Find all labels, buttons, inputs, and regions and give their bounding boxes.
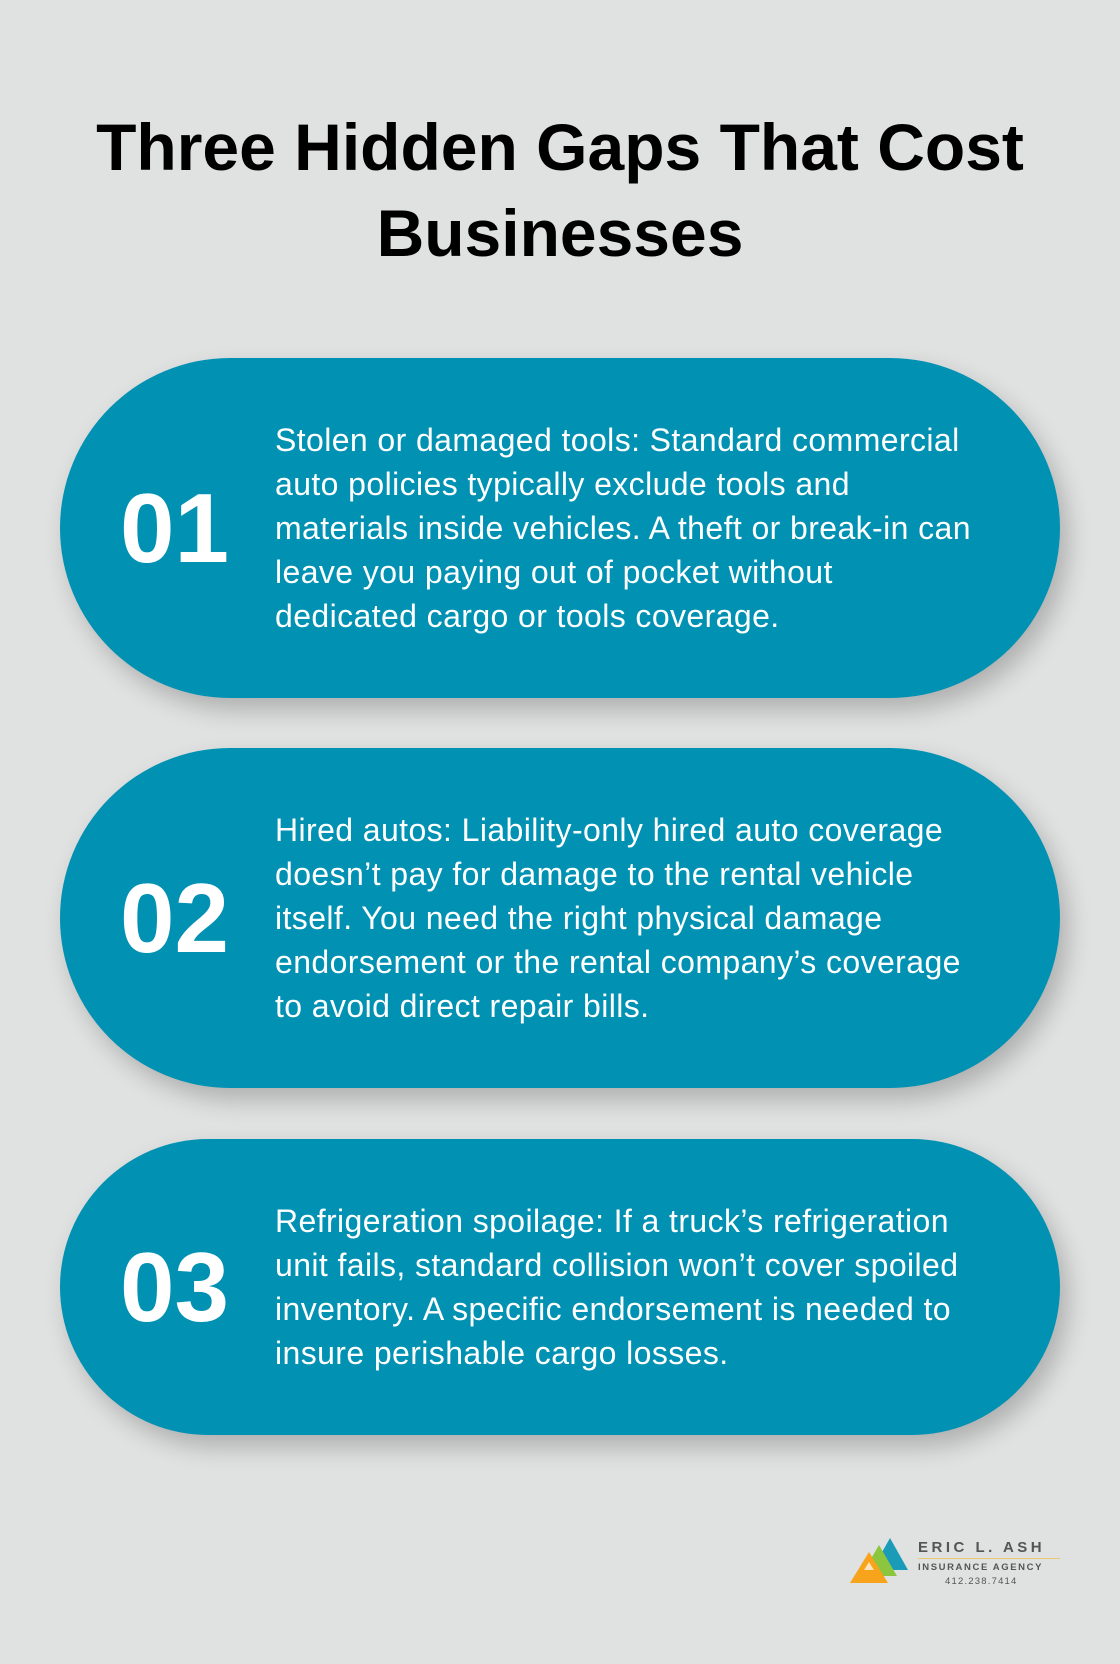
number 02: 02 (120, 863, 229, 973)
text: hired autos: endorsement or the rental company’s coverage (275, 944, 961, 980)
title: Businesses (377, 196, 743, 270)
text: hired autos: to avoid direct repair bills. (275, 988, 649, 1024)
logo (850, 1538, 1060, 1587)
text: refrigeration: inventory. A specific endorsement is needed to (275, 1291, 951, 1327)
text: hired autos: itself. You need the right physical damage (275, 900, 882, 936)
text: stolen tools: dedicated cargo or tools coverage. (275, 598, 780, 634)
text: hired autos: doesn’t pay for damage to the rental vehicle (275, 856, 913, 892)
icon: triangles (850, 1538, 908, 1583)
logo text (918, 1539, 1060, 1587)
panel: gap 01 (60, 358, 1060, 698)
logo text: ERIC L. ASH (918, 1539, 1045, 1556)
text: hired autos: Hired autos: Liability-only hired auto coverage (275, 812, 943, 848)
text: refrigeration (275, 1203, 958, 1371)
panel: gap 03 (60, 1139, 1060, 1435)
text: hired autos (275, 812, 961, 1024)
logo text: INSURANCE AGENCY (918, 1562, 1043, 1573)
text: stolen tools: leave you paying out of pocket without (275, 554, 833, 590)
text: refrigeration: insure perishable cargo losses. (275, 1335, 729, 1371)
number 01: 01 (120, 473, 229, 583)
number 03: 03 (120, 1232, 229, 1342)
text: stolen tools: auto policies typically exclude tools and (275, 466, 850, 502)
text: stolen tools: Stolen or damaged tools: Standard commercial (275, 422, 960, 458)
panel: gap 02 (60, 748, 1060, 1088)
logo text: 412.238.7414 (945, 1576, 1018, 1587)
title: Three Hidden Gaps That Cost (96, 110, 1024, 184)
text: refrigeration: unit fails, standard collision won’t cover spoiled (275, 1247, 958, 1283)
text: stolen tools: materials inside vehicles. A theft or break-in can (275, 510, 971, 546)
text: stolen tools (275, 422, 971, 634)
text: refrigeration: Refrigeration spoilage: If a truck’s refrigeration (275, 1203, 949, 1239)
title (96, 110, 1024, 270)
